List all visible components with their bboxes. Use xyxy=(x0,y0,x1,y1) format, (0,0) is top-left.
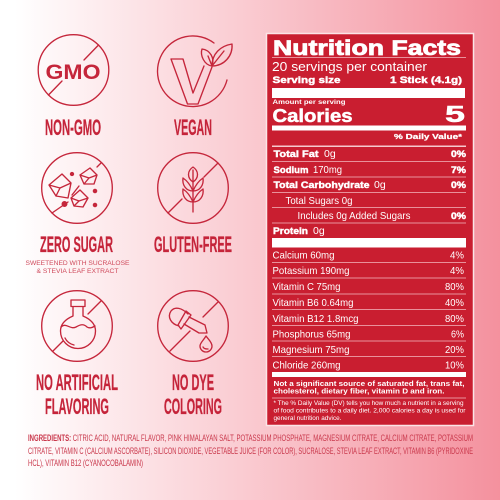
label: no dye coloring: NO DYE xyxy=(172,370,214,395)
footnote: not a significant source xyxy=(274,379,464,396)
sweetener note: SWEETENED WITH SUCRALOSE xyxy=(26,260,130,267)
vitamins and minerals: 80% xyxy=(445,313,464,325)
nutrient rows: Sodium xyxy=(274,165,308,176)
vitamins and minerals: Vitamin B12 1.8mcg xyxy=(272,313,359,325)
label: no artificial flavoring: NO ARTIFICIAL xyxy=(36,370,118,395)
amount per serving: Amount per serving xyxy=(272,99,346,106)
calories xyxy=(272,101,465,127)
calories: 5 xyxy=(445,101,465,127)
nutrient rows: Total Sugars 0g xyxy=(286,195,353,207)
text: GLUTEN-FREE xyxy=(154,232,232,257)
vitamins and minerals: Chloride 260mg xyxy=(272,360,341,372)
heading: nutrition facts: Nutrition Facts xyxy=(273,37,461,60)
vitamins and minerals: 4% xyxy=(450,265,464,277)
label: no artificial flavoring xyxy=(36,370,118,419)
nutrient rows xyxy=(272,148,467,237)
vitamins and minerals: Magnesium 75mg xyxy=(272,344,350,356)
nutrient rows: 170mg xyxy=(313,164,342,176)
vitamins and minerals: Potassium 190mg xyxy=(272,265,350,277)
footnote: not a significant source: Not a significant source of saturated fat, trans fat, xyxy=(274,379,464,388)
icon: zero sugar xyxy=(42,153,112,223)
icon: no dye coloring xyxy=(158,291,228,361)
footnote: not a significant source: cholesterol, dietary fiber, vitamin D and iron. xyxy=(274,386,444,396)
serving size: Serving size xyxy=(272,75,340,86)
vitamins and minerals: Vitamin B6 0.64mg xyxy=(272,297,354,309)
footnote: daily value: of food contributes to a daily diet. 2,000 calories a day is used for xyxy=(274,408,466,414)
label: no dye coloring xyxy=(164,370,222,419)
label: no artificial flavoring: FLAVORING xyxy=(45,394,109,419)
percent daily value heading: % Daily Value* xyxy=(394,134,462,141)
icon: no artificial flavoring xyxy=(42,291,112,361)
vitamins and minerals: Calcium 60mg xyxy=(272,250,335,262)
servings per container: 20 servings per container xyxy=(272,59,428,74)
panel: nutrition facts xyxy=(266,34,474,426)
vitamins and minerals: 10% xyxy=(445,360,464,372)
nutrient rows: 0g xyxy=(324,148,336,160)
nutrient rows: Total Carbohydrate xyxy=(274,180,370,191)
text: COLORING xyxy=(164,394,222,419)
nutrient rows: 0g xyxy=(313,225,325,237)
ingredients: HCL), VITAMIN B12 (CYANOCOBALAMIN) xyxy=(28,458,143,468)
ingredients xyxy=(28,433,473,468)
vitamins and minerals: Phosphorus 65mg xyxy=(272,328,351,340)
nutrient rows: 0g xyxy=(374,179,386,191)
label: non-GMO: NON-GMO xyxy=(45,115,101,140)
serving size: 1 Stick (4.1g) xyxy=(390,75,462,86)
serving size xyxy=(272,75,462,86)
calories: Calories xyxy=(272,106,352,126)
vitamins and minerals: 40% xyxy=(445,297,464,309)
nutrient rows: 0% xyxy=(451,149,467,160)
footnote: daily value xyxy=(274,400,466,422)
icon: vegan xyxy=(158,36,232,107)
vitamins and minerals: Vitamin C 75mg xyxy=(272,281,341,293)
icon: non-GMO xyxy=(38,35,109,105)
nutrient rows: 0% xyxy=(451,180,467,191)
sweetener note xyxy=(26,260,130,275)
vitamins and minerals: 4% xyxy=(450,250,464,262)
vitamins and minerals: 80% xyxy=(445,281,464,293)
footnote: daily value: * The % Daily Value (DV) tells you how much a nutrient in a serving xyxy=(274,400,464,407)
nutrient rows: 0% xyxy=(451,211,467,222)
sweetener note: & STEVIA LEAF EXTRACT xyxy=(36,268,119,275)
vitamins and minerals: 20% xyxy=(445,344,464,356)
text: VEGAN xyxy=(174,115,212,140)
icon: gluten-free xyxy=(158,153,228,223)
vitamins and minerals: 6% xyxy=(451,328,464,340)
footnote: daily value: general nutrition advice. xyxy=(274,415,342,422)
icon: non-GMO: GMO xyxy=(46,61,100,84)
text: ZERO SUGAR xyxy=(40,232,113,257)
nutrient rows: 7% xyxy=(451,165,467,176)
nutrient rows: Includes 0g Added Sugars xyxy=(298,210,410,222)
nutrient rows: Total Fat xyxy=(274,149,319,160)
nutrient rows: Protein xyxy=(273,226,308,237)
vitamins and minerals xyxy=(272,250,466,372)
